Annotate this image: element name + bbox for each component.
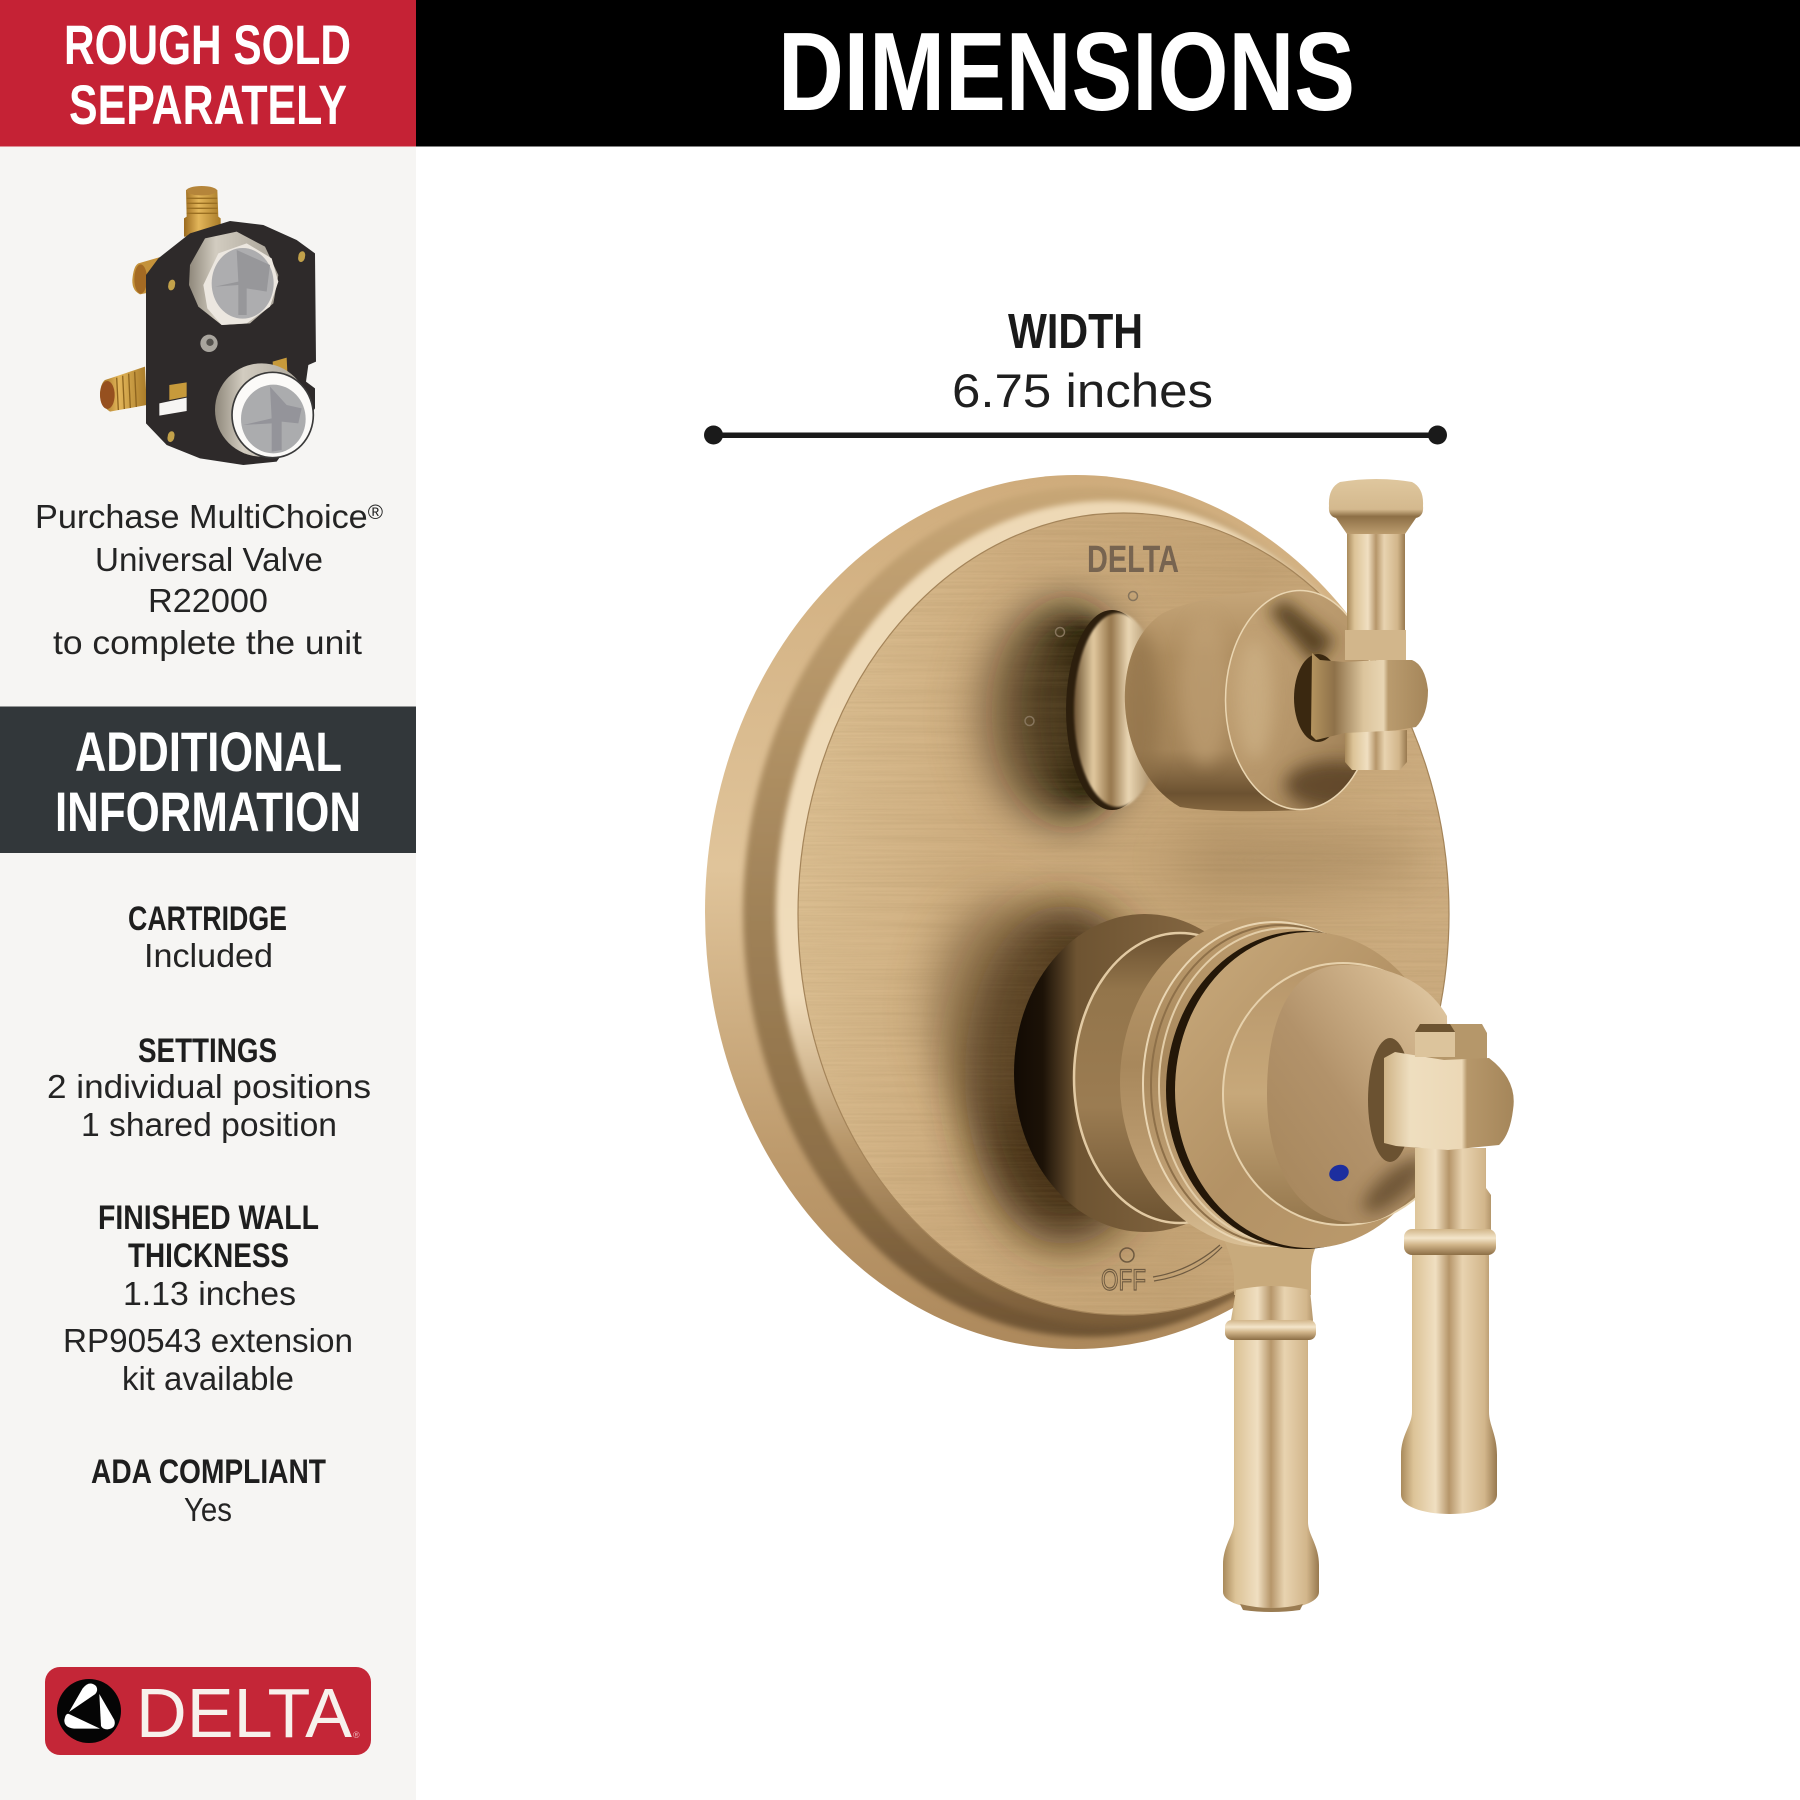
text block: finished wall thickness: RP90543 extension <box>63 1322 353 1359</box>
round trim plate <box>705 475 1450 1349</box>
text: purchase valve note: Universal Valve <box>95 541 323 578</box>
top brass fitting <box>184 186 221 237</box>
text block: finished wall thickness: FINISHED WALL <box>98 1199 319 1237</box>
lower left lever <box>1223 1286 1319 1612</box>
text block: ada compliant: ADA COMPLIANT <box>91 1453 326 1491</box>
panel heading: additional information: INFORMATION <box>55 780 361 843</box>
text: purchase valve note: to complete the unit <box>53 624 362 661</box>
lever stem <box>1347 530 1405 632</box>
text block: settings: SETTINGS <box>138 1032 277 1070</box>
title bar: DIMENSIONS <box>778 10 1355 134</box>
lower silver ring <box>215 363 313 458</box>
text block: settings: 1 shared position <box>81 1106 337 1143</box>
brass tabs <box>169 358 287 400</box>
text block: finished wall thickness: THICKNESS <box>128 1237 289 1275</box>
upper diverter knob <box>1066 590 1385 811</box>
text block: settings <box>47 1032 371 1143</box>
blue cold indicator dot <box>1327 1162 1351 1184</box>
lower brass pipe <box>100 367 147 412</box>
OFF marking <box>1101 1245 1222 1297</box>
upper lever <box>1294 479 1428 770</box>
OFF marking: OFF <box>1101 1264 1146 1297</box>
text block: settings: 2 individual positions <box>47 1068 371 1105</box>
lower right lever <box>1368 1024 1514 1514</box>
text: purchase valve note <box>35 498 383 661</box>
text: purchase valve note: R22000 <box>148 582 268 619</box>
width dimension label <box>952 305 1213 417</box>
left brass pipe <box>132 257 162 294</box>
product: valve trim <box>705 475 1514 1612</box>
lever root <box>1222 1235 1322 1295</box>
title bar <box>416 0 1800 146</box>
black mounting plate <box>146 221 316 465</box>
icon: delta logo: ® <box>353 1730 360 1740</box>
plate slot <box>159 398 187 416</box>
text block: finished wall thickness <box>63 1199 353 1397</box>
text block: ada compliant: Yes <box>184 1491 232 1528</box>
icon: rough-in valve <box>100 186 316 465</box>
square neck <box>1345 630 1406 660</box>
cone face <box>1267 965 1448 1223</box>
panel heading: rough sold separately: SEPARATELY <box>69 73 347 136</box>
panel: left sidebar <box>0 0 416 1800</box>
text: purchase valve note: ® <box>368 502 383 524</box>
lever block <box>1311 653 1428 740</box>
upper silver nut <box>189 232 278 325</box>
dark recess <box>1294 654 1342 742</box>
lever head <box>1329 479 1423 534</box>
text block: finished wall thickness: kit available <box>122 1360 294 1397</box>
lower tab <box>1345 730 1407 770</box>
panel heading: rough sold separately: ROUGH SOLD <box>64 13 351 76</box>
panel heading: additional information: ADDITIONAL <box>75 720 342 783</box>
icon: delta logo: DELTA <box>136 1674 352 1752</box>
text block: cartridge: CARTRIDGE <box>128 900 287 938</box>
panel heading: additional information <box>0 706 416 853</box>
sidebar background <box>0 0 416 1800</box>
text block: finished wall thickness: 1.13 inches <box>123 1275 296 1312</box>
plate engraved DELTA: DELTA <box>1087 539 1179 581</box>
position marks <box>1025 592 1138 726</box>
mounting holes <box>167 251 305 442</box>
text: purchase valve note: Purchase MultiChoice <box>35 498 356 535</box>
text block: cartridge <box>128 900 287 974</box>
width dimension label: 6.75 inches <box>952 364 1213 417</box>
panel heading: rough sold separately <box>0 0 416 146</box>
lower temperature knob <box>1014 914 1463 1295</box>
icon: delta logo <box>45 1667 371 1755</box>
text block: ada compliant <box>91 1453 326 1528</box>
text block: cartridge: Included <box>144 937 273 974</box>
center screw <box>200 335 218 352</box>
width dimension line <box>704 426 1447 444</box>
width dimension label: WIDTH <box>1008 305 1143 359</box>
